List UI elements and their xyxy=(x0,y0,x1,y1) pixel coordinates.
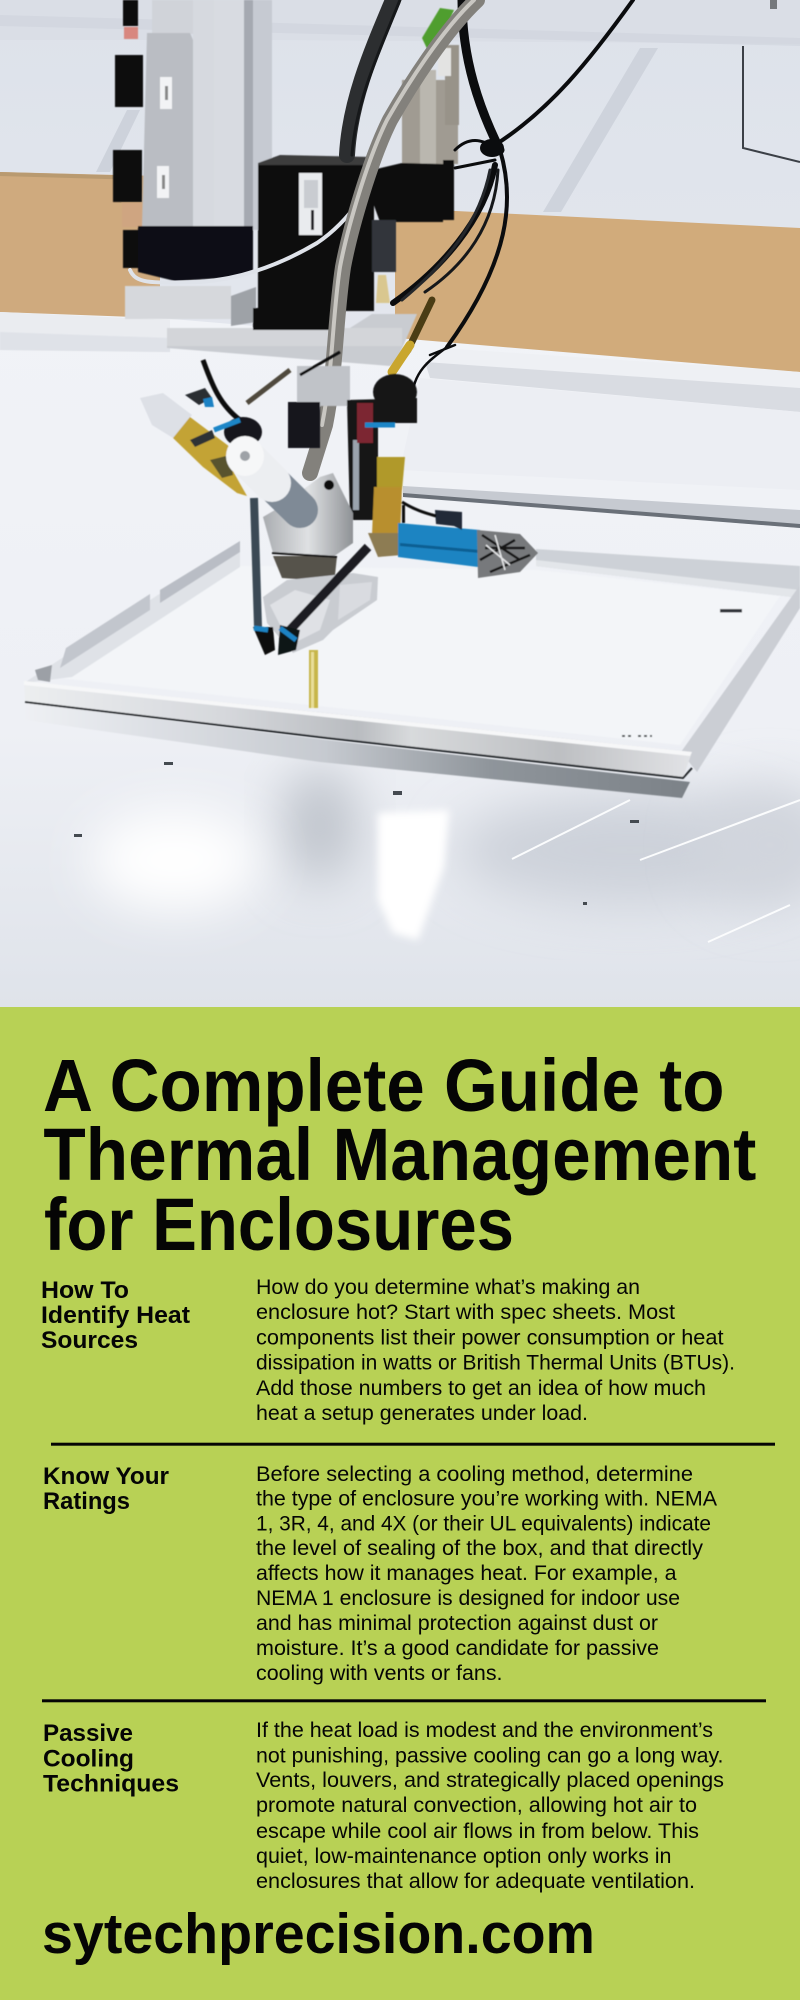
black box xyxy=(253,155,374,330)
section 1 heading: Sources xyxy=(41,1327,138,1354)
tan wall band xyxy=(0,172,800,374)
gold wrapped cable xyxy=(406,296,436,358)
linear column xyxy=(152,0,193,34)
section 3 heading xyxy=(43,1720,179,1798)
section 2 body: 1, 3R, 4, and 4X (or their UL equivalents) indicate xyxy=(256,1513,711,1536)
rough metal end xyxy=(477,530,538,578)
black blocks on left xyxy=(113,0,143,268)
section 2 body: NEMA 1 enclosure is designed for indoor use xyxy=(256,1587,680,1610)
black bracket xyxy=(372,163,443,222)
section 3 heading: Passive xyxy=(43,1720,133,1747)
tip xyxy=(309,650,318,708)
frame front face xyxy=(24,681,692,778)
section 2 body: and has minimal protection against dust or xyxy=(256,1612,658,1635)
section 3 body: quiet, low-maintenance option only works in xyxy=(256,1845,672,1868)
section 1 body: Add those numbers to get an idea of how much xyxy=(256,1377,706,1400)
floor reflections and scratches xyxy=(74,762,800,942)
section 1 body: components list their power consumption or heat xyxy=(256,1326,724,1349)
section 1 body: dissipation in watts or British Thermal Units (BTUs). xyxy=(256,1352,735,1375)
title xyxy=(43,1044,756,1266)
blue pneumatic block xyxy=(398,523,480,567)
section 3 heading: Techniques xyxy=(43,1770,179,1798)
section 3 body xyxy=(256,1719,724,1893)
glass nozzle xyxy=(140,393,192,438)
section 1: heat sources xyxy=(41,1276,735,1425)
steel cylinder xyxy=(402,8,459,164)
gold block xyxy=(377,457,405,490)
back wall xyxy=(0,0,800,329)
head dome xyxy=(263,473,353,557)
section 3 heading: Cooling xyxy=(43,1746,134,1772)
section 1 body xyxy=(256,1276,735,1425)
print head xyxy=(140,352,538,708)
frame reflection xyxy=(25,703,690,798)
dark ring xyxy=(273,556,337,580)
black manifold xyxy=(288,402,320,448)
frame inner surface xyxy=(621,608,743,738)
section 2 body: moisture. It’s a good candidate for passive xyxy=(256,1637,659,1660)
section 2 body xyxy=(256,1463,717,1685)
grey control panel xyxy=(142,33,193,228)
braided grey hose xyxy=(310,0,477,473)
section 3 body: escape while cool air flows in from below. This xyxy=(256,1820,699,1843)
gold wrap xyxy=(173,417,247,496)
white table surface xyxy=(0,312,800,1007)
head neck xyxy=(297,366,350,406)
black servo motor xyxy=(138,226,253,281)
frame corner bracket xyxy=(35,665,52,682)
section 1 heading xyxy=(41,1277,190,1354)
section 3 body: enclosures that allow for adequate ventilation. xyxy=(256,1870,695,1893)
platform plates xyxy=(125,286,417,366)
section 3 body: Vents, louvers, and strategically placed openings xyxy=(256,1769,724,1792)
dark cable bundle xyxy=(347,0,393,155)
frame left rail xyxy=(28,552,240,682)
section 1 body: How do you determine what’s making an xyxy=(256,1276,640,1299)
section 2 body: cooling with vents or fans. xyxy=(256,1662,502,1685)
photo: welding head over metal enclosure frame xyxy=(0,0,800,1007)
frame back rail xyxy=(536,548,800,590)
section 1 body: heat a setup generates under load. xyxy=(256,1402,588,1425)
section 2 body: Before selecting a cooling method, determine xyxy=(256,1463,693,1486)
title: Thermal Management xyxy=(43,1113,756,1196)
legs xyxy=(254,498,258,627)
section 2 body: the type of enclosure you’re working with. NEMA xyxy=(256,1488,717,1511)
website footer: sytechprecision.com xyxy=(42,1902,595,1966)
section 3 body: If the heat load is modest and the environment’s xyxy=(256,1719,713,1742)
black cable bundle right xyxy=(462,0,500,150)
frame right rail xyxy=(681,585,800,772)
enclosure frame xyxy=(24,541,800,798)
section 3: passive cooling xyxy=(43,1719,724,1893)
rough white nozzle body xyxy=(263,573,378,653)
silver tube xyxy=(247,458,300,510)
section 2 heading: Ratings xyxy=(43,1488,130,1515)
section 1 body: enclosure hot? Start with spec sheets. Most xyxy=(256,1301,675,1324)
section 1 heading: Identify Heat xyxy=(41,1302,190,1329)
section 2 heading: Know Your xyxy=(43,1463,169,1490)
section 3 body: promote natural convection, allowing hot air to xyxy=(256,1794,697,1817)
title: A Complete Guide to xyxy=(43,1044,724,1127)
section 2 heading xyxy=(43,1463,169,1515)
section 1 heading: How To xyxy=(41,1277,129,1304)
section 2 body: affects how it manages heat. For example, a xyxy=(256,1562,677,1585)
section 2 body: the level of sealing of the box, and that directly xyxy=(256,1537,704,1560)
title: for Enclosures xyxy=(44,1183,514,1266)
section 2: ratings xyxy=(43,1463,717,1685)
cables xyxy=(130,0,633,473)
machine column and motors xyxy=(113,0,459,366)
section 3 body: not punishing, passive cooling can go a long way. xyxy=(256,1744,724,1768)
white signal cable xyxy=(128,212,348,284)
